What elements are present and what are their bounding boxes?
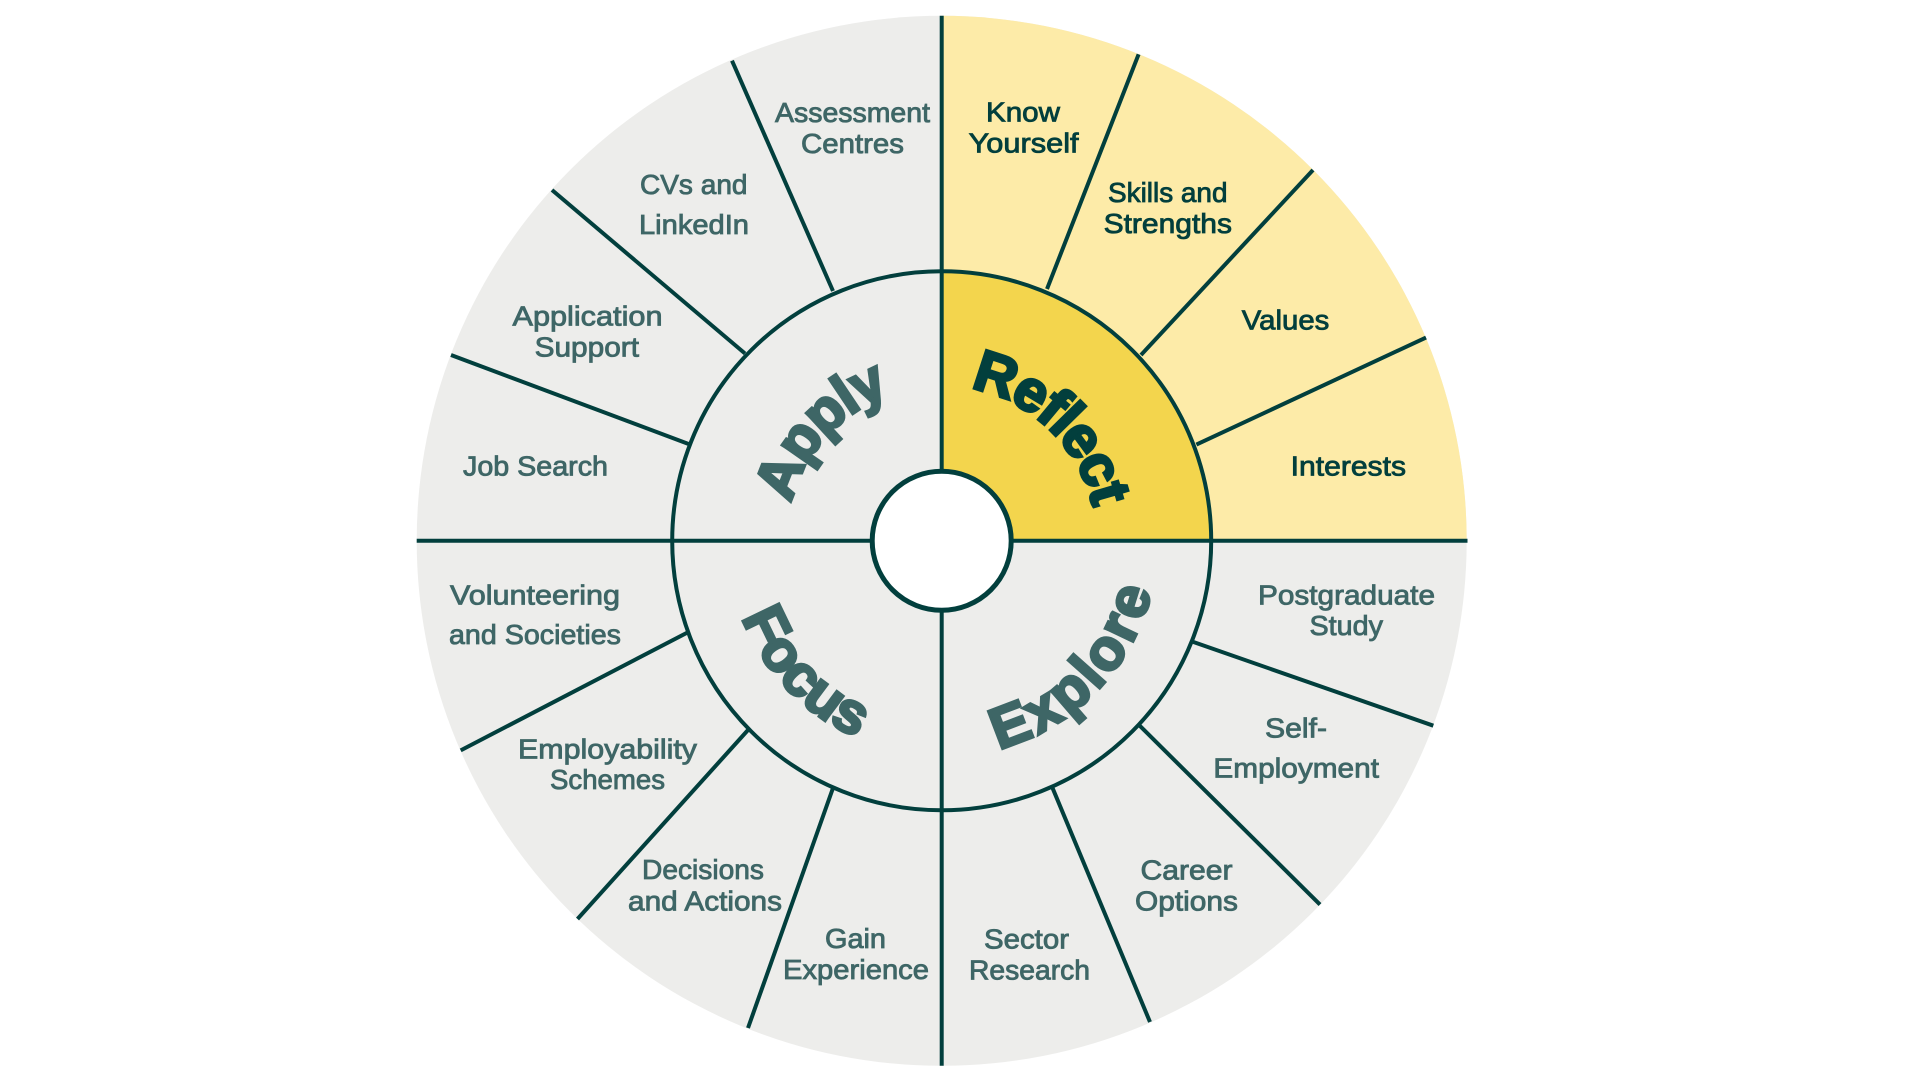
label: Decisions and Actions: and Actions — [628, 886, 782, 917]
outer ring: grey base disc — [417, 16, 1467, 1066]
label: Employability Schemes — [518, 734, 697, 795]
label: Career Options: Career — [1140, 855, 1232, 886]
label: CVs and LinkedIn — [639, 169, 749, 240]
label: Decisions and Actions — [628, 854, 782, 917]
explore segment labels — [969, 580, 1435, 986]
label: Know Yourself: Know — [986, 96, 1061, 127]
label: Self-Employment — [1213, 713, 1379, 784]
label: Sector Research: Sector — [984, 923, 1069, 954]
label: Volunteering and Societies: Volunteering — [450, 579, 620, 610]
focus segment labels — [449, 579, 929, 985]
label: Assessment Centres — [775, 97, 930, 159]
quadrant dividers — [417, 16, 1468, 1066]
label: Skills and Strengths: Strengths — [1104, 208, 1232, 239]
label: CVs and LinkedIn: LinkedIn — [639, 209, 749, 240]
label: Career Options — [1135, 855, 1238, 917]
inner ring: reflect quadrant in mid yellow — [942, 271, 1211, 541]
heading: Apply: Apply — [757, 364, 881, 504]
label: Volunteering and Societies — [449, 579, 621, 650]
label: Values: Values — [1242, 305, 1329, 336]
label: Gain Experience: Experience — [783, 954, 929, 985]
label: Assessment Centres: Assessment — [775, 97, 930, 128]
label: Know Yourself — [969, 96, 1079, 158]
heading: Explore: Explore — [986, 586, 1150, 750]
apply segment labels — [463, 97, 930, 482]
label: Gain Experience — [783, 923, 929, 985]
label: Sector Research: Research — [969, 955, 1090, 986]
label: Know Yourself: Yourself — [969, 128, 1079, 158]
label: Assessment Centres: Centres — [801, 128, 904, 159]
reflect segment labels — [969, 96, 1406, 482]
label: Self-Employment: Self- — [1265, 713, 1327, 744]
label: Application Support — [512, 301, 662, 362]
label: Skills and Strengths: Skills and — [1108, 177, 1228, 208]
heading: Reflect: Reflect — [972, 348, 1130, 509]
label: Postgraduate Study — [1258, 580, 1435, 641]
label: Skills and Strengths — [1104, 177, 1232, 239]
label: Employability Schemes: Schemes — [550, 764, 665, 795]
heading: Focus: Focus — [741, 602, 867, 735]
label: Volunteering and Societies: and Societies — [449, 619, 621, 650]
label: Decisions and Actions: Decisions — [642, 854, 764, 885]
label: Postgraduate Study: Postgraduate — [1258, 580, 1435, 611]
label: Gain Experience: Gain — [825, 923, 886, 954]
label: Career Options: Options — [1135, 886, 1238, 917]
centre hub — [872, 471, 1011, 610]
label: Employability Schemes: Employability — [518, 734, 697, 765]
label: Application Support: Support — [535, 331, 639, 362]
segment dividers — [451, 54, 1433, 1028]
label: Application Support: Application — [512, 301, 662, 332]
label: Sector Research — [969, 923, 1090, 986]
label: Self-Employment: Employment — [1213, 753, 1379, 784]
label: Interests: Interests — [1291, 451, 1406, 482]
label: Job Search: Job Search — [463, 451, 608, 482]
inner ring outline — [672, 271, 1211, 810]
label: CVs and LinkedIn: CVs and — [640, 169, 748, 200]
label: Postgraduate Study: Study — [1310, 610, 1383, 641]
outer ring: reflect quadrant in light yellow — [942, 16, 1467, 541]
